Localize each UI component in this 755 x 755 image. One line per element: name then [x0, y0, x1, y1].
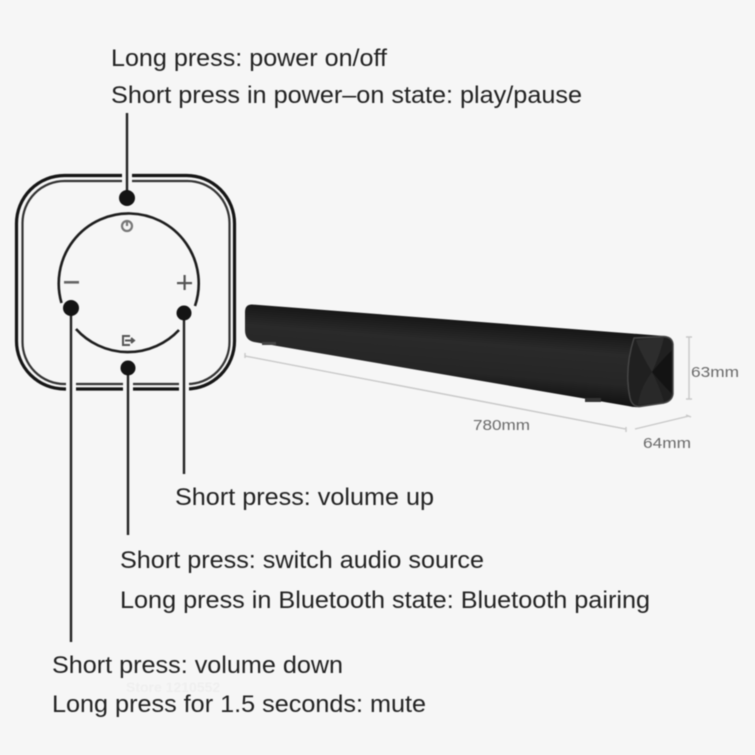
label: 63mm: 63mm — [691, 365, 739, 381]
watermark: Store 1210552 — [126, 679, 220, 695]
leader lines — [71, 113, 184, 642]
soundbar — [245, 304, 673, 407]
icon: source input — [123, 336, 134, 345]
text: power button description: Long press: power on/off — [111, 45, 387, 72]
end cap — [628, 336, 673, 407]
dimension: depth — [635, 415, 691, 429]
label: 780mm: 780mm — [473, 418, 530, 434]
foot right — [585, 398, 601, 402]
text: volume down description: Short press: volume down — [52, 652, 343, 679]
icon: power — [122, 220, 132, 231]
text: source button description — [120, 547, 650, 614]
end cap facets — [636, 337, 664, 372]
text: volume up description: Short press: volume up — [175, 484, 434, 511]
text: source button description: Short press: switch audio source — [120, 547, 484, 574]
dimension: width — [245, 353, 626, 432]
foot left — [262, 342, 276, 345]
soundbar body — [245, 304, 673, 407]
button dots — [63, 190, 192, 376]
text: source button description: Long press in Bluetooth state: Bluetooth pairing — [120, 587, 650, 614]
icon: plus — [177, 275, 192, 290]
button ring arcs — [59, 213, 199, 352]
text: volume down description — [52, 652, 426, 718]
remote control outline — [16, 176, 234, 389]
text: volume down description: Long press for 1.5 seconds: mute — [52, 691, 426, 718]
text: power button description: Short press in power–on state: play/pause — [111, 82, 582, 109]
gaps in outline for leader lines — [66, 171, 189, 393]
icon: minus — [64, 281, 79, 284]
label: 64mm: 64mm — [643, 436, 691, 452]
text: power button description — [111, 45, 582, 109]
dimension: height — [686, 337, 692, 399]
